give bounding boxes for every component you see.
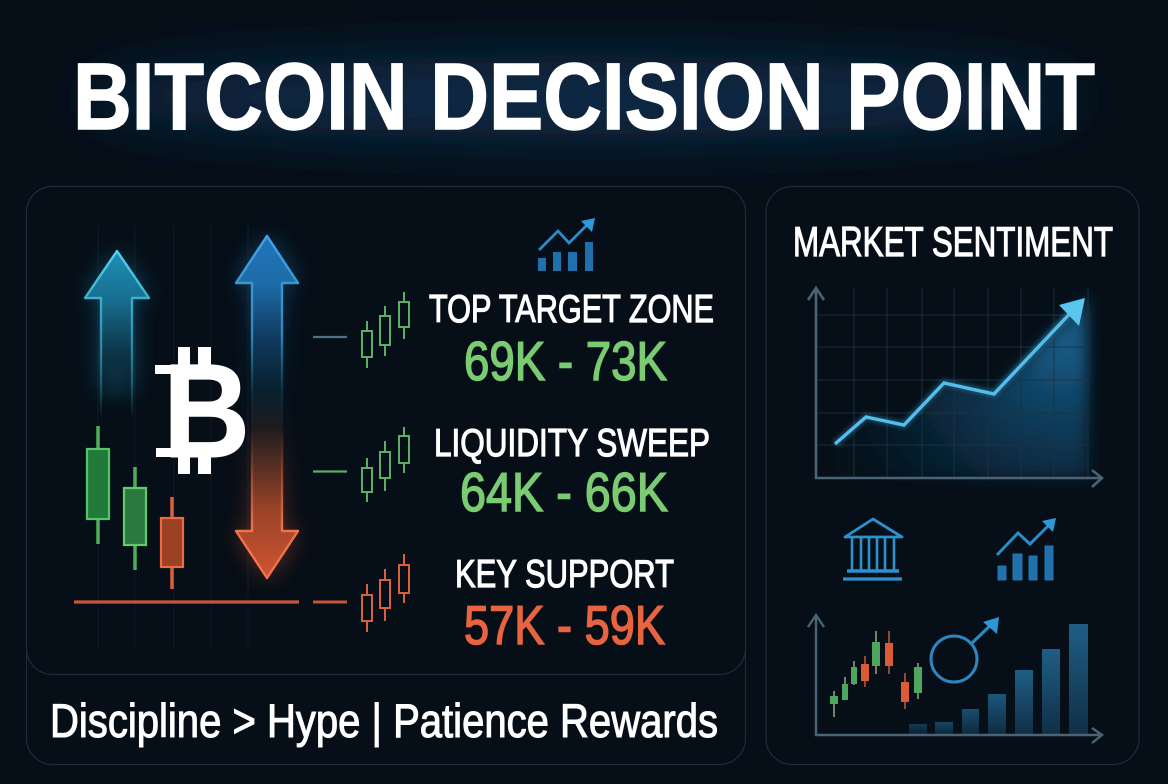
level 1: top target zone: 69K - 73K bbox=[464, 330, 667, 392]
icon: growth chart small bbox=[538, 218, 595, 271]
support line bbox=[74, 600, 299, 604]
chart: candlesticks and volume bars bbox=[808, 615, 1102, 743]
footer slogan: Discipline > Hype | Patience Rewards bbox=[50, 694, 718, 747]
level 1: top target zone bbox=[313, 288, 714, 392]
chart: sentiment line bbox=[808, 288, 1102, 487]
level 2: liquidity sweep: 64K - 66K bbox=[460, 461, 668, 523]
level 2: liquidity sweep bbox=[313, 422, 710, 523]
level 3: key support: KEY SUPPORT bbox=[455, 553, 674, 596]
arrow: left up arrow bbox=[85, 251, 149, 420]
chart: large candlesticks bbox=[87, 426, 183, 589]
panel: price levels bbox=[26, 186, 746, 764]
level 2: liquidity sweep: LIQUIDITY SWEEP bbox=[434, 422, 710, 465]
panel: market sentiment bbox=[766, 186, 1139, 764]
icon: bank bbox=[843, 519, 902, 579]
icon: growth chart bbox=[997, 518, 1056, 580]
icon: bitcoin symbol: B bbox=[163, 337, 250, 486]
level 1: top target zone: TOP TARGET ZONE bbox=[429, 288, 714, 331]
icon: male symbol circle arrow bbox=[931, 617, 999, 682]
level 3: key support bbox=[313, 553, 674, 656]
arrow: double up and down arrow bbox=[236, 236, 298, 578]
level 3: key support: 57K - 59K bbox=[464, 594, 665, 656]
